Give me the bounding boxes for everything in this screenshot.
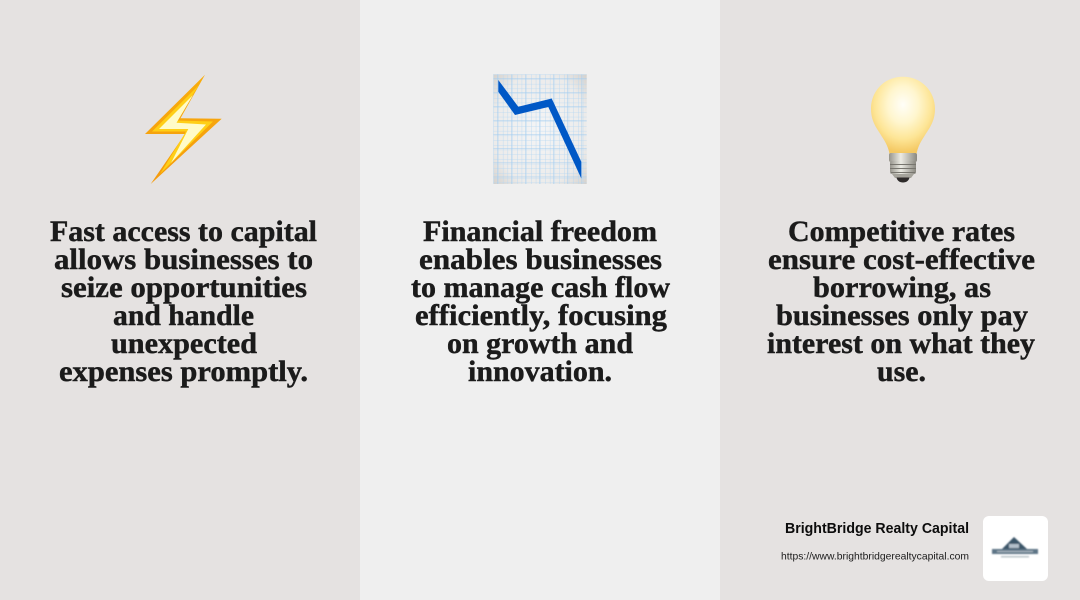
icon: declining chart <box>493 74 587 184</box>
panel: competitive rates <box>720 0 1080 600</box>
text: financial freedom: on growth and <box>447 327 633 360</box>
icon: lightning bolt <box>145 75 222 184</box>
text: financial freedom: enables businesses <box>419 243 662 276</box>
text: competitive rates: use. <box>877 355 926 388</box>
text: competitive rates: ensure cost-effective <box>768 243 1035 276</box>
text: competitive rates: Competitive rates <box>788 215 1015 248</box>
text: fast access: allows businesses to <box>54 243 313 276</box>
text: financial freedom: innovation. <box>468 355 612 388</box>
text: financial freedom: efficiently, focusing <box>415 299 667 332</box>
logo tile <box>983 516 1048 581</box>
text: competitive rates <box>767 215 1035 388</box>
text: fast access <box>50 215 317 388</box>
panel: financial freedom <box>360 0 720 600</box>
text: fast access: unexpected <box>111 327 257 360</box>
company url: https://www.brightbridgerealtycapital.com <box>781 550 969 562</box>
text: financial freedom: Financial freedom <box>423 215 657 248</box>
panel: fast access <box>0 0 360 600</box>
text: fast access: seize opportunities <box>61 271 307 304</box>
company name: BrightBridge Realty Capital <box>785 521 969 537</box>
text: fast access: expenses promptly. <box>59 355 308 388</box>
text: fast access: Fast access to capital <box>50 215 317 248</box>
text: financial freedom: to manage cash flow <box>411 271 670 304</box>
text: competitive rates: interest on what they <box>767 327 1035 360</box>
text: fast access: and handle <box>113 299 254 332</box>
text: competitive rates: borrowing, as <box>813 271 991 304</box>
text: competitive rates: businesses only pay <box>776 299 1028 332</box>
icon: company logo <box>992 537 1038 558</box>
icon: light bulb <box>871 77 935 182</box>
text: financial freedom <box>411 215 670 388</box>
footer: company branding <box>781 516 1048 581</box>
